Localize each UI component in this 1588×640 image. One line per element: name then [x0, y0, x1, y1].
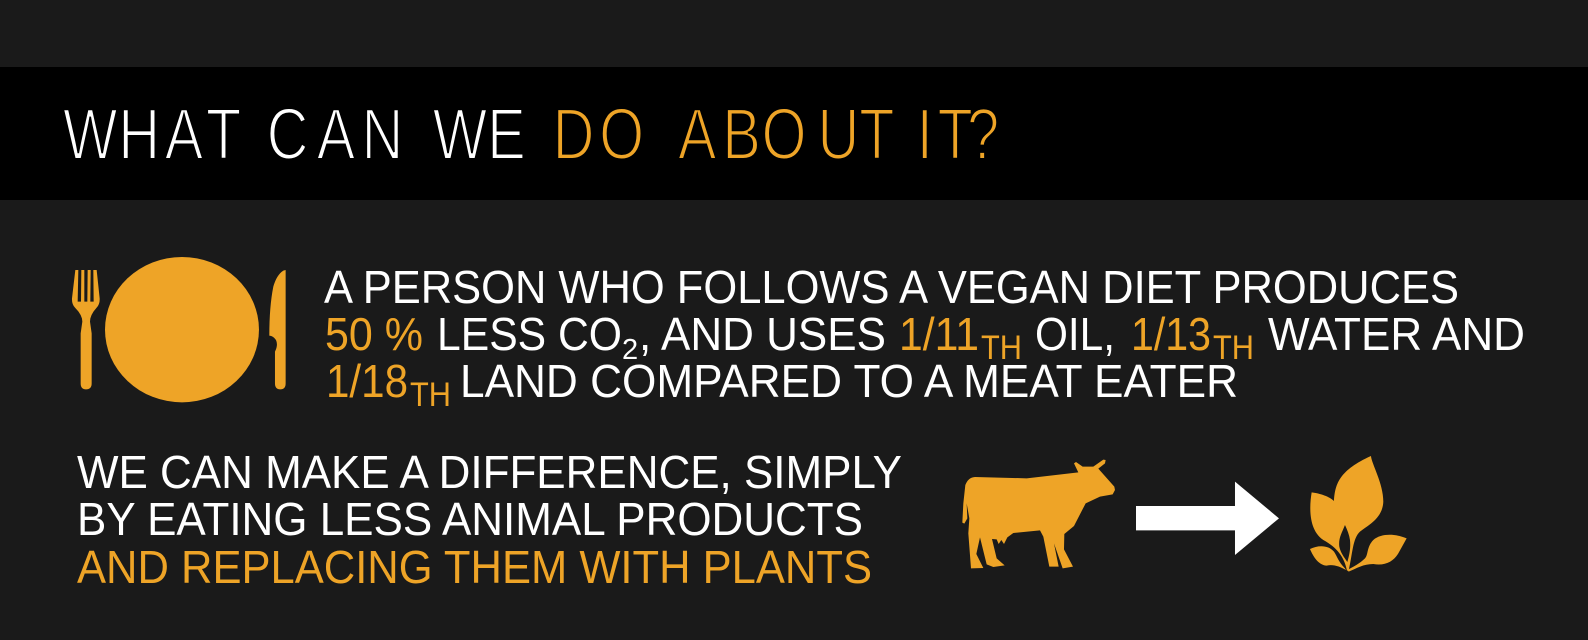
title: white part: WHAT — [63, 94, 241, 174]
arrow — [1136, 482, 1279, 555]
title: white part — [63, 94, 526, 174]
panel: title band — [0, 67, 1588, 200]
icon: knife — [269, 270, 286, 389]
line 2: BY EATING LESS ANIMAL PRODUCTS — [77, 493, 863, 545]
line 1: WE CAN MAKE A DIFFERENCE, SIMPLY — [77, 446, 902, 498]
line 3: AND REPLACING THEM WITH PLANTS — [77, 541, 872, 593]
line 2: TH — [1213, 329, 1254, 367]
title — [63, 94, 999, 174]
title: orange part: ABOUT — [678, 94, 894, 174]
title: white part: WE — [433, 94, 526, 174]
icon: plate — [105, 257, 259, 402]
title: orange part — [553, 94, 999, 174]
line 2: 1/13 — [1131, 308, 1211, 360]
text block: make a difference — [77, 446, 902, 593]
line 3: 1/18 — [326, 355, 408, 407]
text block: vegan diet statistics — [324, 261, 1525, 414]
line 2: OIL, — [1035, 308, 1115, 360]
line 2: LESS CO — [437, 308, 622, 360]
line 3: LAND COMPARED TO A MEAT EATER — [460, 355, 1238, 407]
line 2: WATER AND — [1268, 308, 1525, 360]
icon: fork, plate and knife — [72, 257, 286, 402]
title: white part: CAN — [267, 94, 403, 174]
title: orange part: IT? — [917, 94, 999, 174]
line 3: TH — [410, 376, 451, 414]
icon: fork — [72, 270, 100, 389]
line 2: , AND USES — [639, 308, 886, 360]
icon: cow — [962, 460, 1115, 568]
line 2: 2 — [622, 334, 638, 366]
line 1: A PERSON WHO FOLLOWS A VEGAN DIET PRODUCES — [324, 261, 1459, 313]
title: orange part: DO — [553, 94, 644, 174]
line 2: TH — [981, 329, 1022, 367]
icon: plant — [1310, 456, 1407, 572]
line 2: 1/11 — [899, 308, 979, 360]
line 2: 50 % — [325, 308, 423, 360]
line 2 — [325, 308, 1525, 367]
